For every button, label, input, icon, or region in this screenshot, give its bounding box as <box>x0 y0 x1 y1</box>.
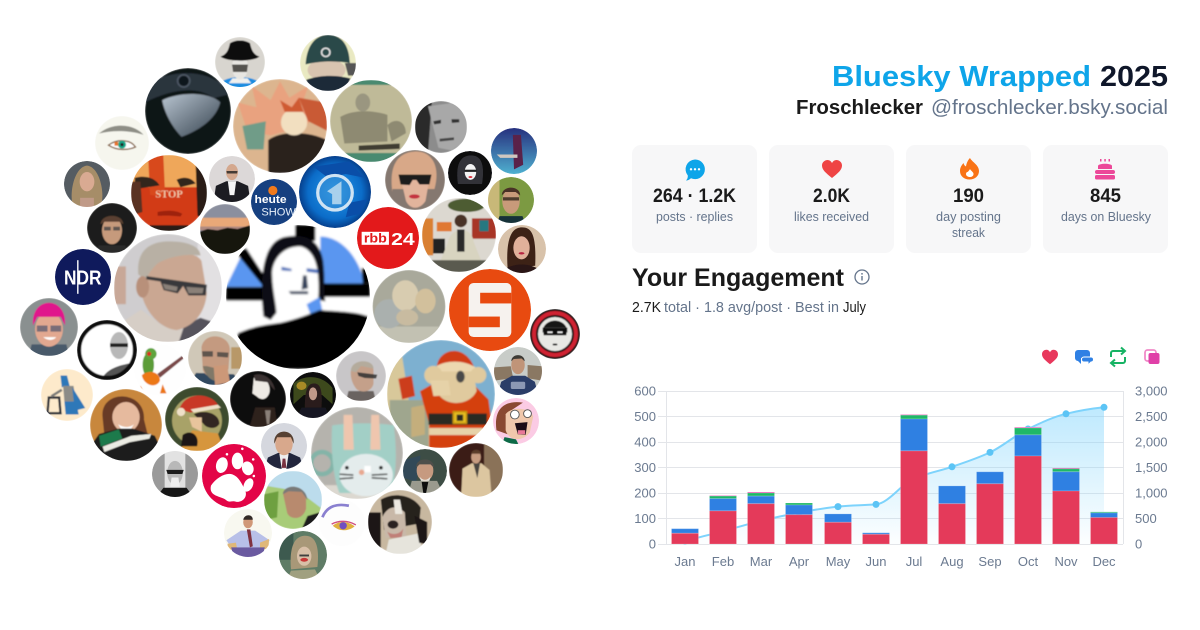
month labels: Feb <box>712 554 734 569</box>
avatar: black and white dog <box>368 490 432 554</box>
stat card: day posting streak: day posting <box>936 209 1001 224</box>
stat card: days on Bluesky: days on Bluesky <box>1061 209 1151 224</box>
avatar: rbb24 logo: 24 <box>391 229 415 249</box>
heading: Your Engagement: Your Engagement <box>632 264 845 292</box>
right axis labels: 2,000 <box>1135 434 1168 450</box>
right axis labels: 2,500 <box>1135 409 1168 424</box>
right axis labels: 3,000 <box>1135 384 1168 398</box>
month labels: Sep <box>978 554 1002 569</box>
avatar: woman with red mask <box>279 531 327 579</box>
avatar: black hat drawing <box>215 37 265 87</box>
text: heute show: heute <box>254 194 287 206</box>
profile name and handle: Froschlecker <box>796 97 923 119</box>
title: Bluesky Wrapped <box>832 61 1091 93</box>
cumulative line <box>685 407 1104 541</box>
avatar: smiling man with beard <box>403 449 447 493</box>
engagement summary: July <box>843 300 867 316</box>
avatar: main profile portrait <box>226 225 370 369</box>
cumulative area <box>685 407 1104 544</box>
avatar: cartoon man in striped tie <box>224 509 272 557</box>
stat card: day posting streak: streak <box>952 225 985 240</box>
avatar: woman among dark leaves <box>290 372 336 418</box>
avatar: red paw logo <box>202 444 266 508</box>
avatar: sunset <box>200 204 250 254</box>
text: NDR: NDR <box>64 267 102 289</box>
stat card: likes received: likes received <box>794 209 869 224</box>
left axis labels: 500 <box>634 409 656 424</box>
left axis labels: 200 <box>634 486 656 500</box>
avatar: man in trench coat <box>449 443 503 497</box>
bar: Nov <box>1052 468 1080 544</box>
right axis labels: 1,000 <box>1135 486 1168 500</box>
engagement summary: total · 1.8 avg/post · Best in <box>664 300 839 316</box>
avatar: blue stage figure <box>491 128 537 174</box>
left axis labels: 0 <box>649 536 656 552</box>
icon: speech bubble <box>686 159 705 181</box>
left axis labels <box>634 384 656 552</box>
left axis labels: 600 <box>634 384 656 398</box>
avatar: woman with red lips <box>498 225 546 273</box>
grid lines <box>658 391 1124 544</box>
text: STOP WAR: STOP <box>155 190 183 201</box>
avatar: pink haired person <box>20 298 78 356</box>
left axis labels: 400 <box>634 434 656 450</box>
bar: Feb <box>710 496 736 544</box>
avatar: man in suit and tie <box>261 423 307 469</box>
left axis labels: 100 <box>634 511 656 526</box>
avatar: black and white face <box>415 101 467 153</box>
right axis labels: 500 <box>1135 511 1157 526</box>
avatar: secret society seal <box>530 309 580 359</box>
avatar: man with dark glasses frames <box>87 203 137 253</box>
avatar: man with hand on chin <box>188 331 242 385</box>
avatar: grey haired man in greenery <box>264 471 322 529</box>
avatar: batman with walker <box>41 369 93 421</box>
avatar: sketch of a rider <box>330 80 412 162</box>
month labels: Jan <box>675 554 695 569</box>
avatar: smiling woman in green jacket <box>90 389 162 461</box>
stat card: posts and replies <box>632 145 757 253</box>
bar: Aug <box>938 486 966 544</box>
month labels: May <box>826 554 851 569</box>
avatar: black ring with bald man on white <box>77 320 137 380</box>
avatar: tagesschau globe <box>299 156 371 228</box>
bar: Jul <box>900 414 928 544</box>
avatar: blonde woman <box>64 161 110 207</box>
profile name and handle <box>796 97 1168 119</box>
icon: reposts <box>1111 348 1125 366</box>
avatar: plush animals <box>372 270 446 343</box>
month labels: Dec <box>1092 554 1116 569</box>
icon: replies <box>1075 350 1094 365</box>
stat card: posts and replies: 264 · 1.2K <box>653 186 736 207</box>
icon: heart <box>822 160 842 178</box>
avatar cluster <box>20 35 580 579</box>
avatar: man with glasses in green <box>488 177 534 223</box>
avatar: screaming cartoon woman <box>493 398 539 444</box>
avatar: frog with guitar <box>140 348 184 394</box>
avatar: pale eye <box>95 116 149 170</box>
stat card: day posting streak: 190 <box>953 186 984 207</box>
month labels: Nov <box>1054 554 1078 569</box>
avatar: santa koala comic <box>387 340 495 448</box>
right axis labels <box>1135 384 1168 552</box>
avatar: older man with glasses looking right <box>336 351 386 401</box>
cumulative points <box>682 404 1108 544</box>
avatar: heute show logo: SHOW <box>261 206 296 218</box>
avatar: old man with sunglasses <box>152 451 198 497</box>
avatar: stop war face <box>131 155 207 231</box>
avatar: man in suit <box>209 156 255 202</box>
engagement chart <box>634 384 1168 569</box>
avatar: man in blue hoodie <box>494 347 542 395</box>
icon: likes <box>1042 350 1058 364</box>
avatar: large portrait of man with glasses <box>114 234 222 342</box>
avatar: woman sitting in office <box>422 198 496 272</box>
engagement summary: 2.7K <box>632 300 661 316</box>
profile name and handle: @froschlecker.bsky.social <box>931 97 1168 119</box>
stat card: likes received <box>769 145 894 253</box>
title: 2025 <box>1100 61 1168 93</box>
month labels: Jun <box>866 554 886 569</box>
icon: quotes <box>1145 350 1160 364</box>
month labels: Apr <box>789 554 810 569</box>
right axis labels: 1,500 <box>1135 460 1168 475</box>
avatar: NDR logo <box>55 249 111 305</box>
avatar: orange S logo <box>449 269 531 351</box>
avatar: santa hat lady with cat <box>165 387 229 451</box>
bar: Apr <box>786 503 812 544</box>
avatar: woman with sunglasses <box>385 150 445 210</box>
month labels: Oct <box>1018 554 1038 569</box>
stat card: day posting streak <box>906 145 1031 253</box>
month labels: Mar <box>750 554 773 569</box>
bar: Oct <box>1014 427 1042 544</box>
bar: Jun <box>862 533 890 544</box>
bar: Dec <box>1090 512 1118 544</box>
bar: May <box>824 514 852 544</box>
right axis labels: 0 <box>1135 536 1142 552</box>
icon: flame <box>960 158 979 180</box>
icon: info <box>855 270 869 284</box>
bar: Mar <box>748 492 774 544</box>
month labels <box>675 554 1116 569</box>
stacked bars <box>672 414 1118 544</box>
bar: Jan <box>672 529 698 544</box>
avatar: rainbow eye on white <box>319 500 365 546</box>
avatar: rbb24 logo <box>357 207 419 269</box>
stat card: days on Bluesky <box>1043 145 1168 253</box>
avatar: bunny mug <box>311 407 403 499</box>
avatar: beanie and scarf <box>300 35 356 91</box>
stat card: days on Bluesky: 845 <box>1090 186 1121 207</box>
text: rbb24: rbb <box>364 230 387 245</box>
avatar: dark bird close-up <box>145 68 231 154</box>
month labels: Jul <box>906 554 922 569</box>
stat card: likes received: 2.0K <box>813 186 850 207</box>
chart legend <box>1042 348 1160 366</box>
month labels: Aug <box>940 554 964 569</box>
avatar: heute show logo <box>251 179 297 225</box>
icon: birthday cake <box>1095 159 1115 180</box>
avatar: comic boy with spiky hair <box>233 79 327 173</box>
stat card: posts and replies: posts · replies <box>656 209 733 224</box>
left axis labels: 300 <box>634 460 656 475</box>
bar: Sep <box>976 472 1004 544</box>
avatar: monochrome woman on black <box>448 151 492 195</box>
avatar: black and white woman <box>230 371 286 427</box>
